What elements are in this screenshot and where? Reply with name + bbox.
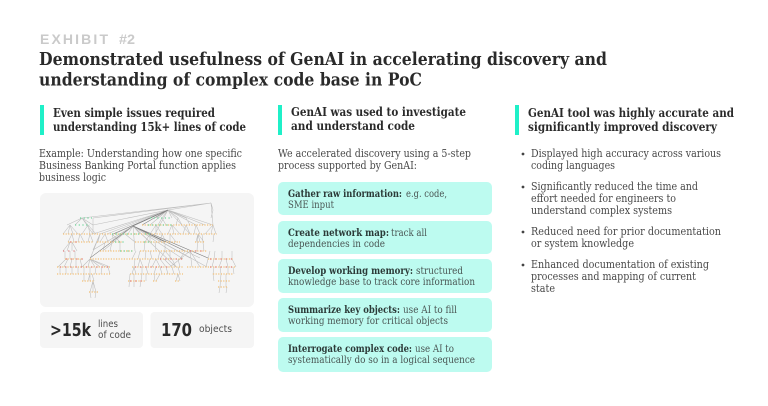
middle column intro text	[278, 146, 471, 172]
bullet 4: state	[531, 281, 555, 295]
bullet 3: or system knowledge	[531, 236, 634, 250]
step 5: Interrogate complex code:	[288, 343, 412, 355]
step 5	[278, 337, 492, 372]
exhibit label: EXHIBIT	[40, 31, 108, 47]
stat: lines of code: lines	[98, 319, 118, 330]
right column heading	[515, 105, 734, 135]
step 4: working memory for critical objects	[288, 315, 448, 327]
bullet 2: Significantly reduced the time and	[531, 179, 699, 193]
left column intro text: Example: Understanding how one specific	[39, 146, 242, 160]
exhibit label: #2	[119, 31, 135, 47]
panel: left column	[39, 105, 254, 348]
title: Demonstrated usefulness of GenAI in accelerating discovery and	[39, 49, 607, 70]
step 4: Summarize key objects:	[288, 304, 400, 316]
step 1: Gather raw information:	[288, 188, 402, 200]
left column heading: understanding 15k+ lines of code	[53, 119, 246, 134]
step 1	[278, 182, 492, 215]
step 5: systematically do so in a logical sequence	[288, 354, 475, 366]
middle column intro text: We accelerated discovery using a 5-step	[278, 146, 471, 160]
middle column intro text: process supported by GenAI:	[278, 158, 417, 172]
bullet 2: understand complex systems	[531, 203, 672, 217]
middle column heading: and understand code	[291, 118, 415, 133]
left column intro text: Business Banking Portal function applies	[39, 158, 236, 172]
panel: right column	[515, 105, 734, 295]
step 4: use AI to fill	[403, 304, 458, 316]
step 1: SME input	[288, 199, 335, 211]
stat: lines of code: of code	[98, 330, 131, 341]
bullet 3: Reduced need for prior documentation	[531, 224, 721, 238]
stat: lines of code	[40, 312, 143, 348]
middle column heading: GenAI was used to investigate	[291, 104, 466, 119]
step 2	[278, 221, 492, 254]
step 3: knowledge base to track core information	[288, 276, 475, 288]
bullet 2: effort needed for engineers to	[531, 191, 676, 205]
middle column heading	[278, 104, 466, 135]
stat: lines of code: >15k	[50, 320, 92, 341]
step 3: Develop working memory:	[288, 265, 413, 277]
title	[39, 49, 607, 90]
step 2: dependencies in code	[288, 238, 385, 250]
right column heading: significantly improved discovery	[528, 119, 718, 134]
panel: middle column	[278, 104, 492, 372]
bullet 1: Displayed high accuracy across various	[531, 146, 721, 160]
bullet 4	[522, 257, 710, 295]
left column intro text	[39, 146, 242, 184]
step 5: use AI to	[415, 343, 454, 355]
bullet 4: processes and mapping of current	[531, 269, 696, 283]
bullet 2	[522, 179, 699, 217]
title: understanding of complex code base in PoC	[39, 70, 422, 90]
bullet 3	[522, 224, 721, 250]
bullet 1	[522, 146, 721, 172]
bullet 4: Enhanced documentation of existing	[531, 257, 710, 271]
step 2: Create network map:	[288, 227, 389, 239]
left column heading	[40, 105, 246, 135]
left column intro text: business logic	[39, 170, 106, 184]
step 2: track all	[391, 227, 428, 239]
network diagram panel	[40, 193, 254, 307]
step 4	[278, 298, 492, 332]
stat: objects: objects	[199, 324, 232, 335]
stat: objects: 170	[161, 320, 192, 341]
left column heading: Even simple issues required	[53, 105, 215, 120]
step 1: e.g. code,	[406, 188, 447, 200]
bullet 1: coding languages	[531, 158, 615, 172]
step 3	[278, 259, 492, 293]
stat: objects	[150, 312, 254, 348]
step 3: structured	[416, 265, 463, 277]
